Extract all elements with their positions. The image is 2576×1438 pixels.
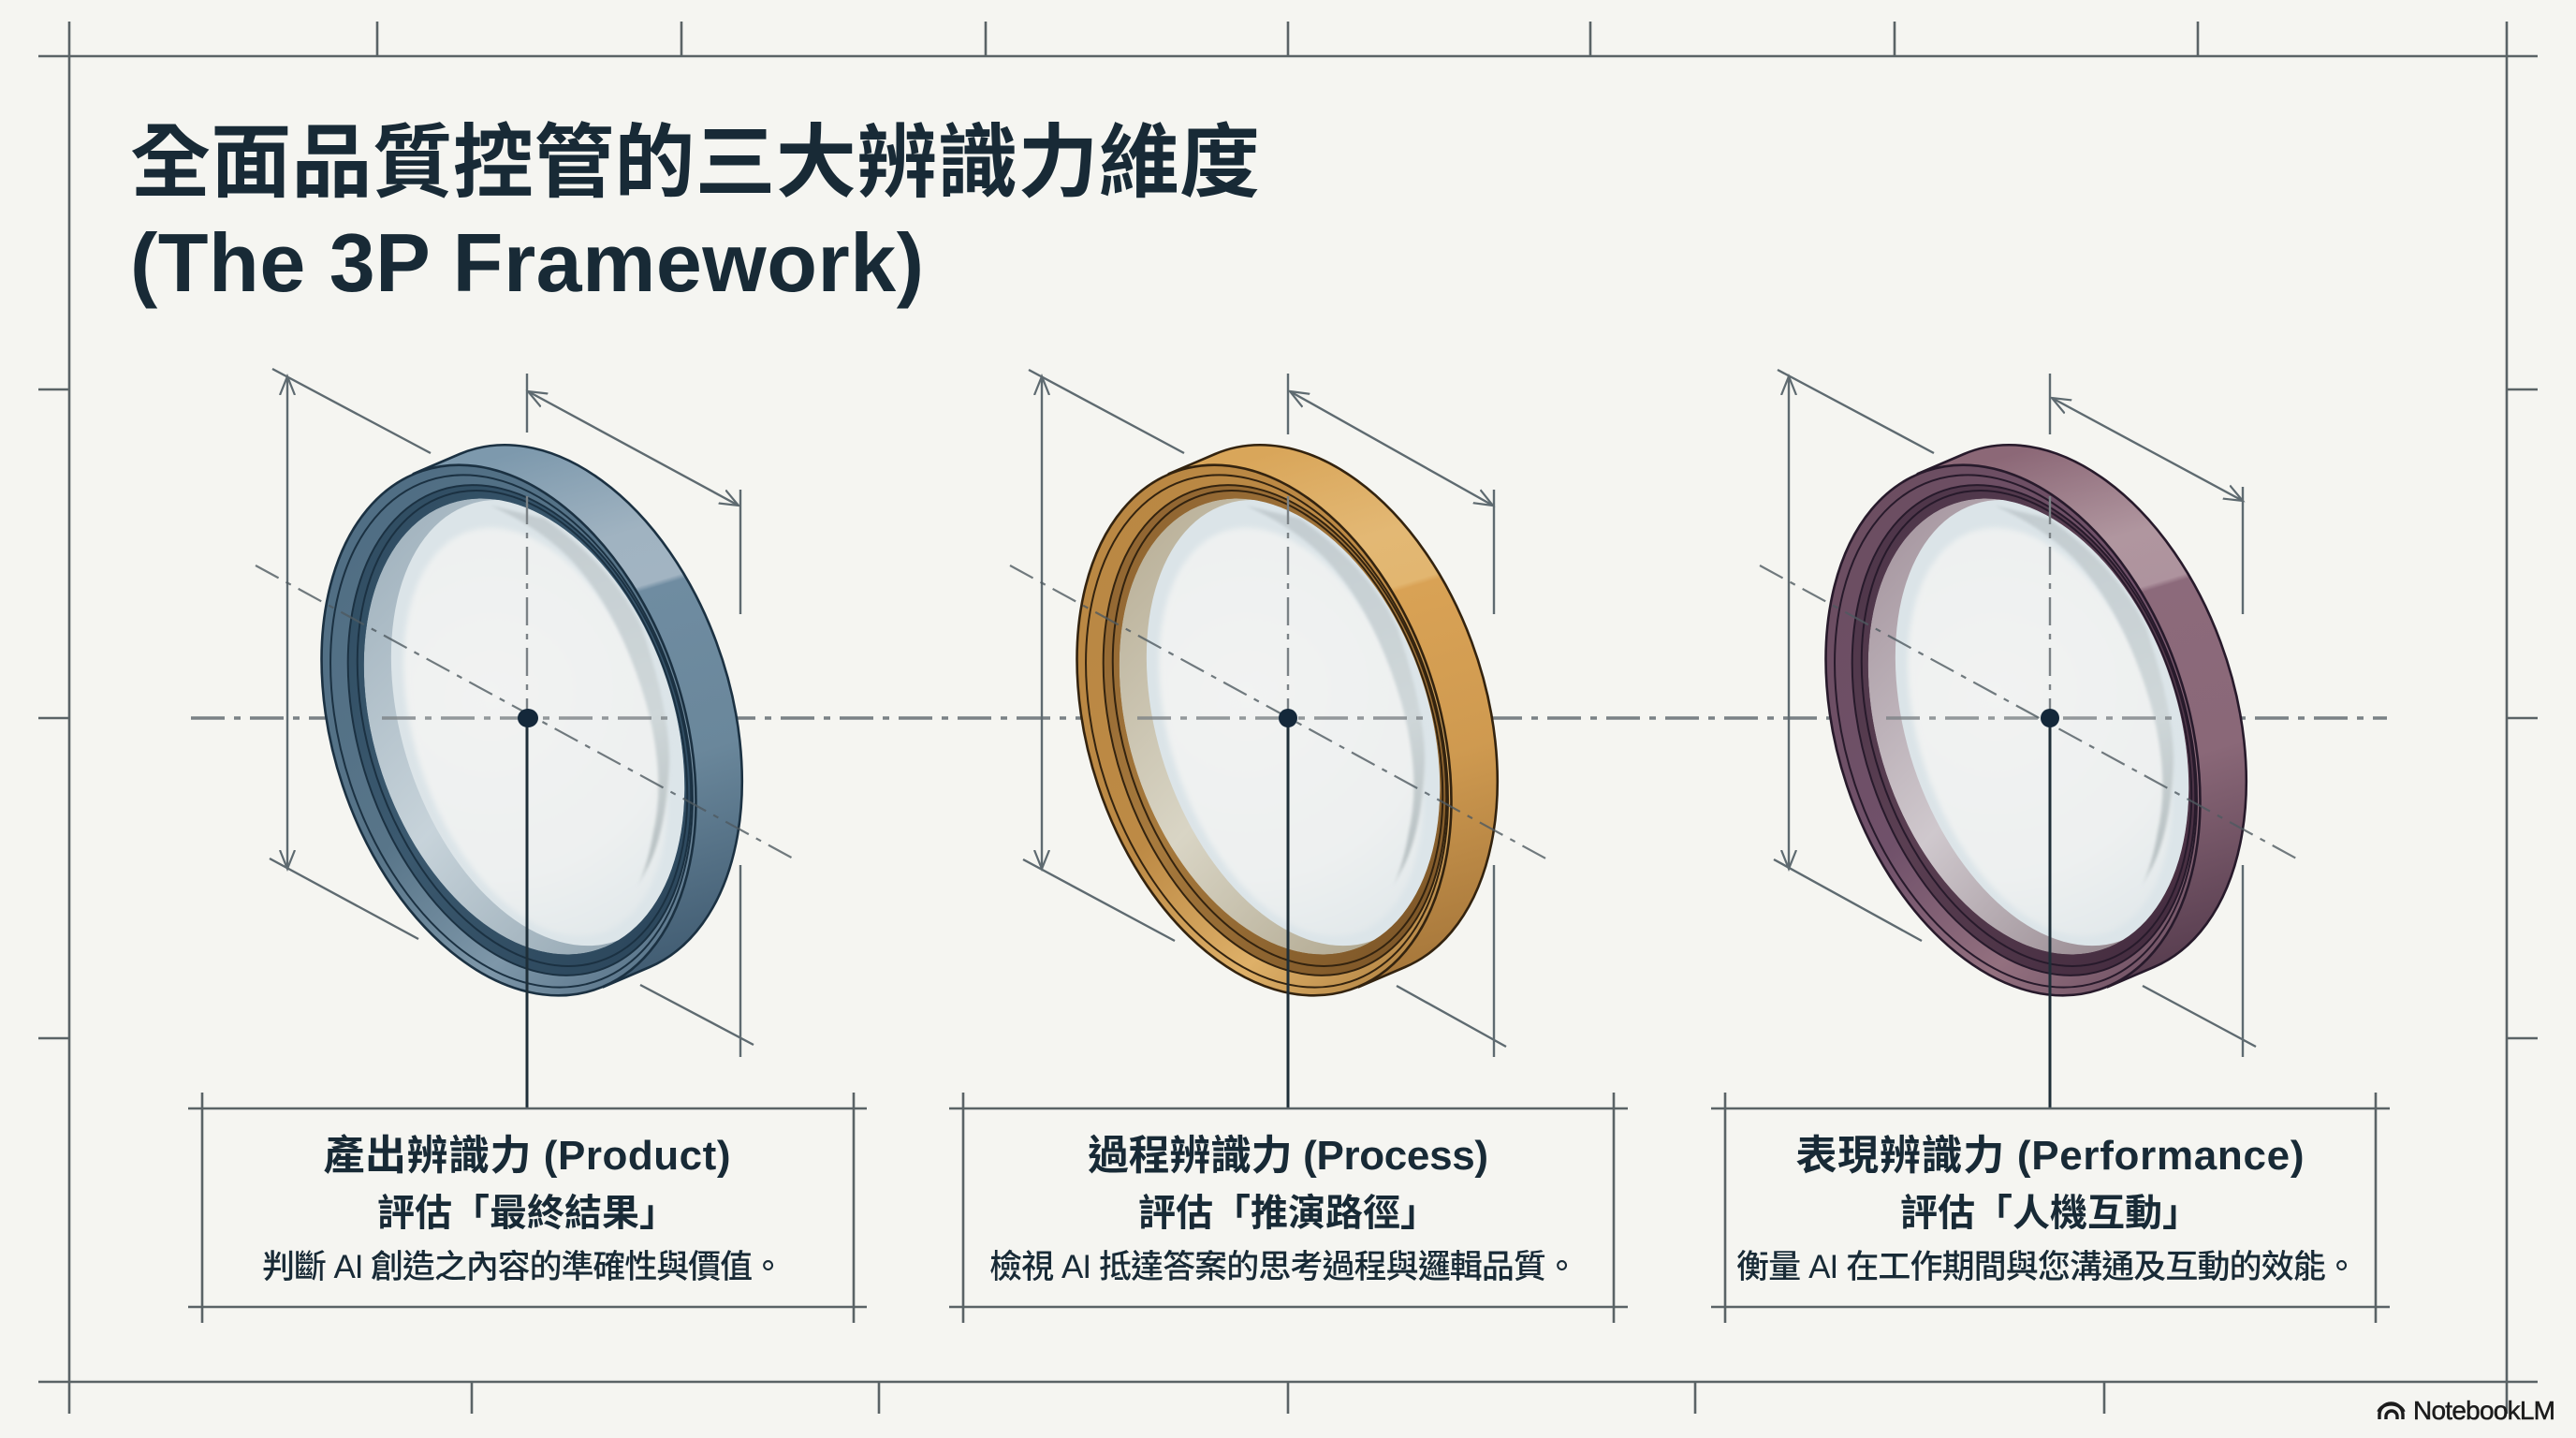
heading: Performance: 表現辨識力 (Performance) [1795, 1133, 2305, 1179]
dimension lines: Performance [1774, 370, 2256, 1057]
lens: Performance [1824, 444, 2248, 997]
title: (The 3P Framework) [130, 216, 924, 309]
axis lines visible through the glass [256, 496, 2300, 860]
leader: Process [1279, 709, 1297, 1108]
heading: Product: 產出辨識力 (Product) [324, 1133, 730, 1179]
subheading: Process: 評估「推演路徑」 [1138, 1193, 1438, 1234]
lens assembly: Product (blue) [256, 369, 761, 1057]
lens assembly: Performance (plum) [1761, 370, 2265, 1057]
dimension lines: Process [1023, 370, 1506, 1057]
panel: Performance [1711, 1093, 2390, 1323]
subheading: Product: 評估「最終結果」 [377, 1193, 677, 1234]
panel: Product [188, 1093, 867, 1323]
subheading: Performance: 評估「人機互動」 [1900, 1193, 2200, 1234]
description: Performance: 衡量 AI 在工作期間與您溝通及互動的效能。 [1736, 1249, 2358, 1285]
lens: Product [320, 444, 743, 997]
lens: Process [1076, 444, 1500, 997]
NotebookLM logo: NotebookLM [2413, 1396, 2555, 1425]
lens assembly: Process (amber) [1012, 370, 1516, 1057]
shared horizontal centre axis [191, 716, 2387, 720]
description: Product: 判斷 AI 創造之內容的準確性與價值。 [262, 1249, 784, 1285]
heading: Process: 過程辨識力 (Process) [1088, 1133, 1488, 1179]
icon: notebook arcs [2378, 1403, 2404, 1419]
dimension lines: Product [270, 369, 754, 1057]
leader: Performance [2041, 709, 2059, 1108]
leader: Product [518, 709, 538, 1108]
panel: Process [949, 1093, 1628, 1323]
title: 全面品質控管的三大辨識力維度 [130, 118, 1260, 208]
title [130, 118, 1260, 309]
description: Process: 檢視 AI 抵達答案的思考過程與邏輯品質。 [989, 1249, 1578, 1285]
